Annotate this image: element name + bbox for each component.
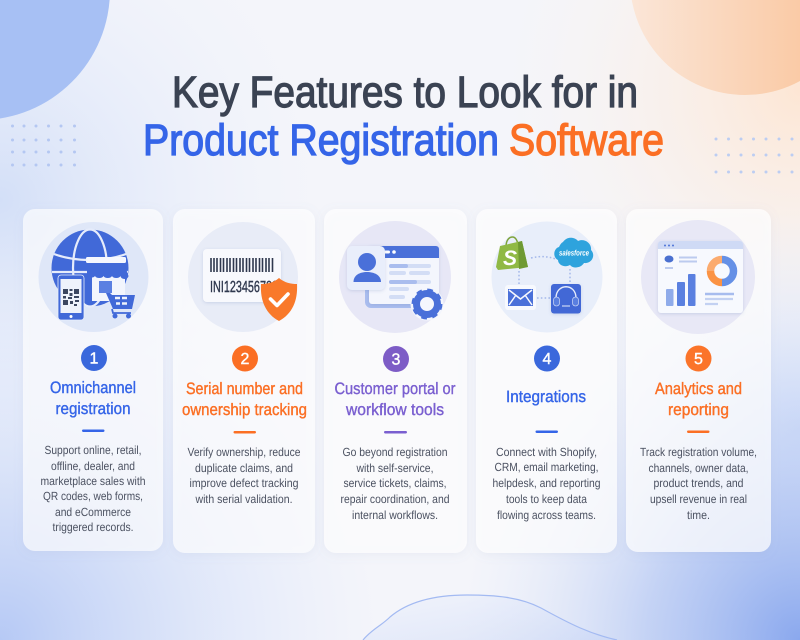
number badge 5: 5 — [694, 351, 703, 368]
heading: workflow tools — [345, 401, 444, 419]
body text: service tickets, claims, — [344, 476, 446, 490]
body text: offline, dealer, and — [51, 459, 135, 473]
body text: Connect with Shopify, — [496, 445, 597, 459]
body text: upsell revenue in real — [650, 492, 747, 506]
body text: channels, owner data, — [648, 461, 748, 475]
body text — [188, 445, 301, 506]
panel: customer portal or workflow tools — [324, 209, 467, 553]
body text: CRM, email marketing, — [494, 460, 598, 474]
number badge 2 — [232, 346, 258, 372]
number badge 4 — [534, 346, 560, 372]
panel: integrations — [476, 209, 617, 553]
top-right peach blob — [630, 0, 800, 95]
heading: Omnichannel — [50, 379, 136, 397]
top-left blue blob — [0, 0, 110, 120]
body text: tools to keep data — [506, 492, 587, 506]
card background — [626, 209, 771, 552]
icon: helpdesk headset — [551, 284, 581, 314]
heading: Integrations — [506, 388, 586, 406]
card background — [173, 209, 315, 553]
panel: serial number and ownership tracking — [173, 209, 315, 553]
body text: product trends, and — [654, 476, 744, 490]
accent line — [234, 431, 256, 434]
heading: Analytics and — [655, 380, 742, 398]
heading: reporting — [668, 401, 729, 419]
number badge 2: 2 — [241, 351, 250, 368]
heading — [182, 380, 307, 419]
card background — [324, 209, 467, 553]
body text: with self-service, — [356, 461, 434, 475]
body text: improve defect tracking — [190, 476, 298, 490]
heading: ownership tracking — [182, 401, 307, 419]
icon: shopify bag: S — [503, 247, 517, 270]
left dot grid — [11, 124, 76, 166]
icon: globe, store, phone and cart — [38, 222, 148, 332]
heading: registration — [56, 400, 130, 418]
number badge 4: 4 — [543, 351, 552, 368]
icon: barcode label and shield — [188, 222, 298, 332]
right dot grid — [714, 138, 794, 174]
panel: omnichannel registration — [23, 209, 163, 551]
body text: Support online, retail, — [44, 443, 142, 457]
icon: salesforce cloud: salesforce — [559, 248, 589, 258]
body text: time. — [687, 508, 710, 522]
icon: analytics dashboard — [641, 220, 755, 334]
heading — [334, 380, 456, 419]
body text: helpdesk, and reporting — [492, 476, 600, 490]
icon: portal window, person and gear — [339, 221, 451, 333]
body text — [492, 445, 600, 522]
body text: Verify ownership, reduce — [188, 445, 301, 459]
heading: Customer portal or — [334, 380, 456, 398]
number badge 1 — [81, 345, 107, 371]
body text: and eCommerce — [55, 505, 131, 519]
body text: with serial validation. — [195, 492, 292, 506]
title line 2 blue: Product Registration — [143, 116, 499, 165]
body text — [340, 445, 450, 522]
heading — [50, 379, 136, 418]
body text: internal workflows. — [352, 508, 438, 522]
card background — [476, 209, 617, 553]
number badge 3: 3 — [392, 352, 401, 368]
bottom wave — [363, 595, 617, 640]
body text: Track registration volume, — [640, 445, 757, 459]
number badge 1: 1 — [90, 350, 99, 368]
heading: Serial number and — [186, 380, 303, 398]
number badge 5 — [686, 346, 712, 372]
title line 2 orange: Software — [509, 116, 664, 165]
icon: barcode label and shield: INI123456789 — [210, 279, 278, 296]
accent line — [536, 430, 558, 433]
body text: QR codes, web forms, — [43, 489, 143, 503]
body text: repair coordination, and — [340, 492, 450, 506]
accent line — [687, 430, 710, 433]
body text: duplicate claims, and — [195, 461, 293, 475]
icon: envelope — [505, 285, 536, 310]
body text — [640, 445, 757, 522]
body text: triggered records. — [52, 520, 134, 534]
icon: connected apps — [492, 222, 602, 332]
accent line — [82, 430, 104, 432]
number badge 3 — [383, 346, 409, 372]
card background — [23, 209, 163, 551]
heading — [655, 380, 742, 419]
accent line — [384, 431, 407, 434]
body text: marketplace sales with — [40, 474, 146, 488]
body text: Go beyond registration — [342, 445, 448, 459]
panel: analytics and reporting — [626, 209, 771, 552]
body text — [40, 443, 146, 534]
title — [143, 68, 664, 165]
title line 1: Key Features to Look for in — [172, 68, 638, 117]
body text: flowing across teams. — [497, 508, 596, 522]
